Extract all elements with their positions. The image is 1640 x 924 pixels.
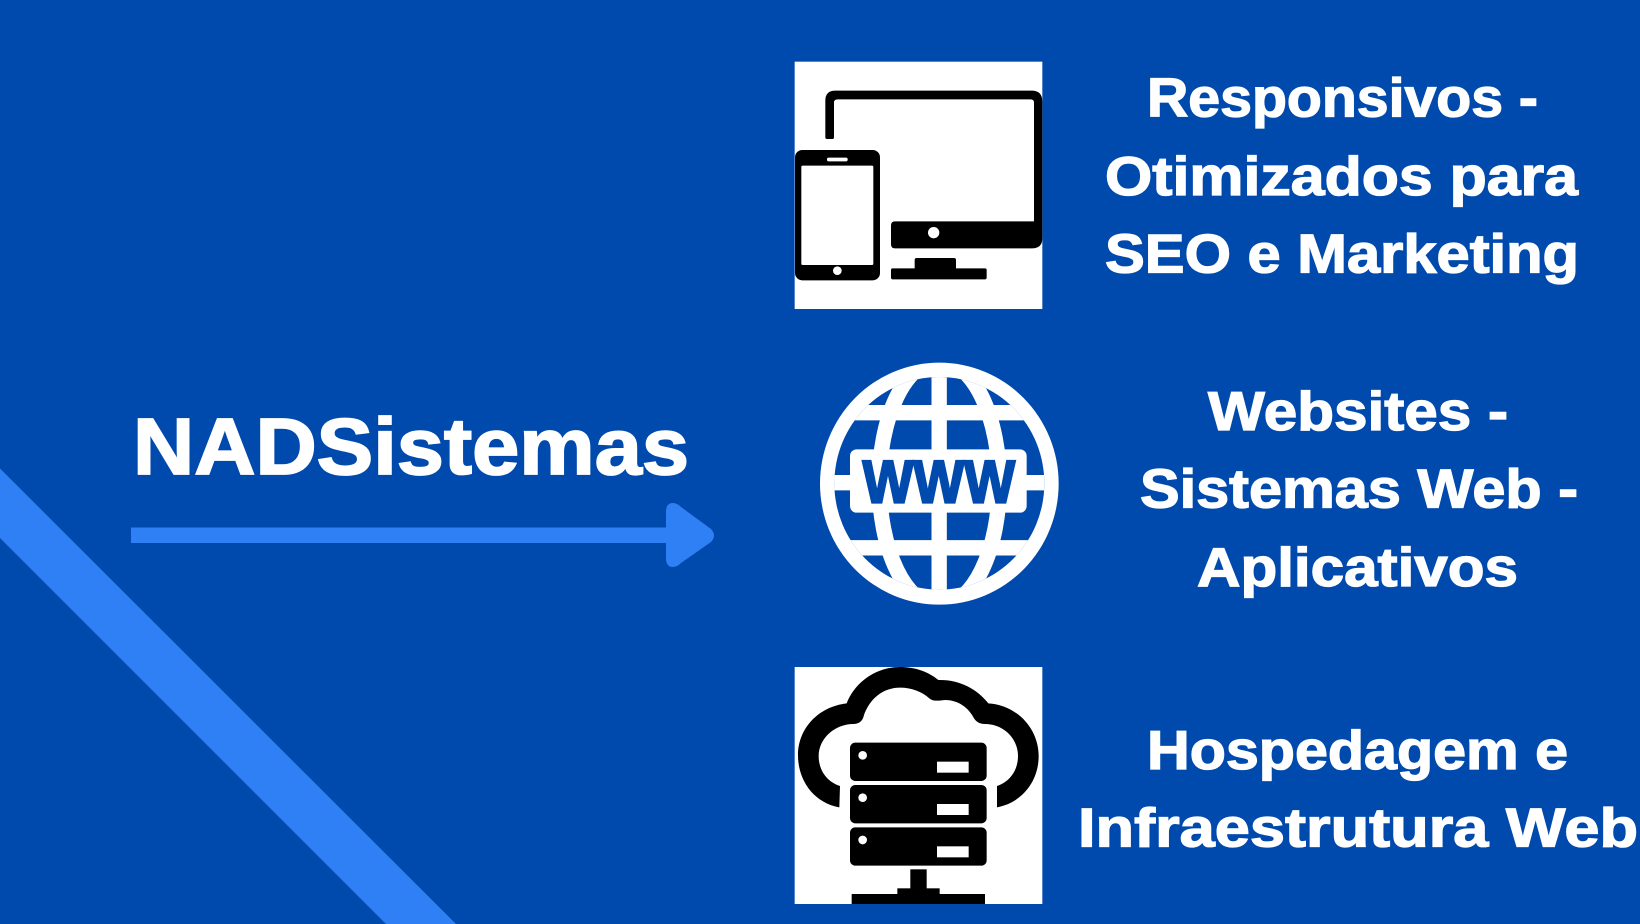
text: hosting: Hospedagem e (1147, 719, 1568, 781)
diagonal band (0, 468, 456, 924)
text: websites: Websites - (1208, 380, 1508, 442)
icon: www globe (820, 361, 1060, 606)
text: websites: Sistemas Web - (1140, 458, 1578, 520)
icon: cloud server (795, 667, 1042, 907)
icon: responsive devices (795, 62, 1042, 309)
text: responsive (1105, 67, 1579, 285)
title: NADSistemas (133, 402, 689, 491)
text: websites (1140, 380, 1578, 598)
text: responsive: Responsivos - (1147, 67, 1538, 129)
text: hosting: Infraestrutura Web (1078, 797, 1638, 859)
text: responsive: Otimizados para (1105, 145, 1578, 207)
icon: www globe: WWW (863, 449, 1015, 516)
arrow (131, 503, 714, 567)
text: hosting (1078, 719, 1638, 859)
text: websites: Aplicativos (1197, 536, 1518, 598)
text: responsive: SEO e Marketing (1105, 223, 1579, 285)
